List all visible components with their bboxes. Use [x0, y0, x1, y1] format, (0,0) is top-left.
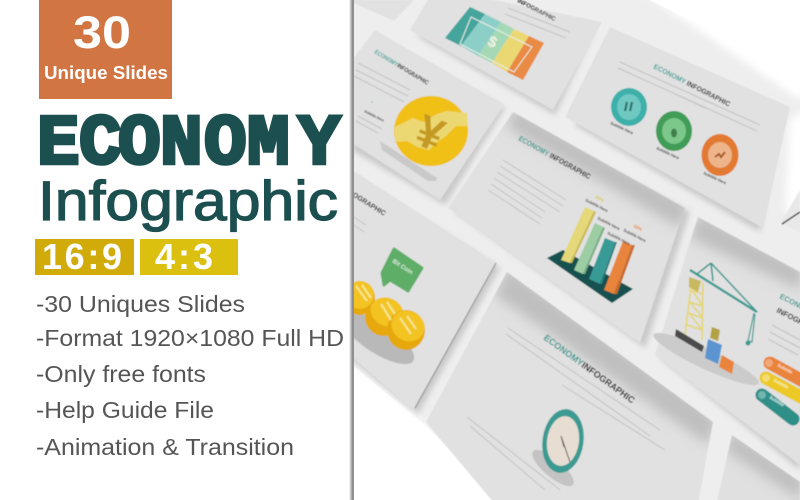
number: 30: [73, 7, 131, 58]
bar labels: [585, 194, 647, 246]
feature list: [36, 291, 344, 460]
icon: speech bubble: Bit Coin: [391, 259, 414, 276]
feature list: -Help Guide File: [36, 397, 214, 423]
feature list: -Animation & Transition: [36, 434, 294, 460]
icon: clock: [542, 408, 584, 474]
coin shadow: [380, 141, 437, 181]
pill labels: Subtitle: [777, 363, 794, 375]
bar labels: Subtitle Here: [607, 230, 631, 246]
pill labels: [758, 359, 800, 419]
badge: 4:3: 4:3: [155, 236, 213, 277]
slide title: ECONOMYINFOGRAPHIC: [542, 333, 637, 406]
small caption: Subtitle Here: [364, 109, 385, 123]
title: infographic: Infographic: [38, 169, 338, 232]
bar labels: Subtitle Here: [623, 227, 647, 243]
slide: bar chart: [448, 106, 690, 343]
badge: 30 unique slides: [39, 0, 172, 99]
bar labels: Subtitle Here: [597, 215, 621, 231]
slide title: ECONOMYINFOGRAPHIC: [373, 50, 430, 87]
panel: slide collage: [335, 0, 800, 500]
panel edge shadow: [349, 0, 354, 500]
icon: speech bubble: [382, 249, 422, 291]
slide: bitcoin: [354, 172, 497, 408]
bar labels: 55%: [595, 194, 605, 203]
slide title: ECONOMY INFOGRAPHIC: [517, 134, 593, 181]
badge: 4:3: [140, 236, 238, 277]
icon: teal circle: [611, 88, 647, 126]
icon: yen coin: ¥: [409, 104, 452, 162]
circle captions: Subtitle Here: [656, 145, 681, 161]
circle captions: Subtitle Here: [610, 120, 635, 136]
slide: money bill: [410, 0, 602, 110]
circle captions: [610, 120, 728, 186]
icon: gold coins: [354, 280, 426, 350]
bar labels: Subtitle Here: [585, 197, 609, 213]
slide: bottom right: [715, 430, 800, 500]
title: economy: ECONOMY: [37, 105, 341, 185]
pill labels: Subtitle: [773, 378, 790, 390]
chart: 3D bars: [547, 207, 635, 303]
icon: construction crane: [675, 263, 757, 374]
icon: green circle: [656, 111, 692, 151]
coin shadow: [354, 312, 414, 364]
slide: top-left fragment: [352, 0, 414, 21]
shadow: [653, 332, 759, 386]
slide title: OGRAPHIC: [351, 192, 387, 218]
caption: Unique Slides: [44, 63, 168, 83]
badge: 16:9: 16:9: [42, 236, 122, 277]
icon: banknote: $: [485, 33, 500, 52]
slide: right edge fragment: [782, 191, 800, 224]
small icon: ◔: [368, 99, 374, 107]
slide: three circles: [565, 27, 790, 228]
icon: banknote: [445, 7, 544, 80]
circle captions: Subtitle Here: [703, 170, 728, 186]
feature list: -Only free fonts: [36, 361, 206, 387]
slide: yen coin: [352, 30, 504, 200]
icon: orange circle: [702, 134, 738, 176]
slide: clock: [426, 266, 718, 500]
shadow: [532, 450, 574, 486]
icon: yen coin: [394, 96, 468, 166]
feature list: -30 Uniques Slides: [36, 291, 245, 317]
slide title: ECONOMY INFOGRAPHIC: [652, 64, 731, 108]
slide: crane: [649, 212, 800, 465]
feature list: -Format 1920×1080 Full HD: [36, 325, 344, 351]
bar labels: 30%: [633, 223, 643, 232]
pill labels: Subtitle: [768, 395, 786, 408]
